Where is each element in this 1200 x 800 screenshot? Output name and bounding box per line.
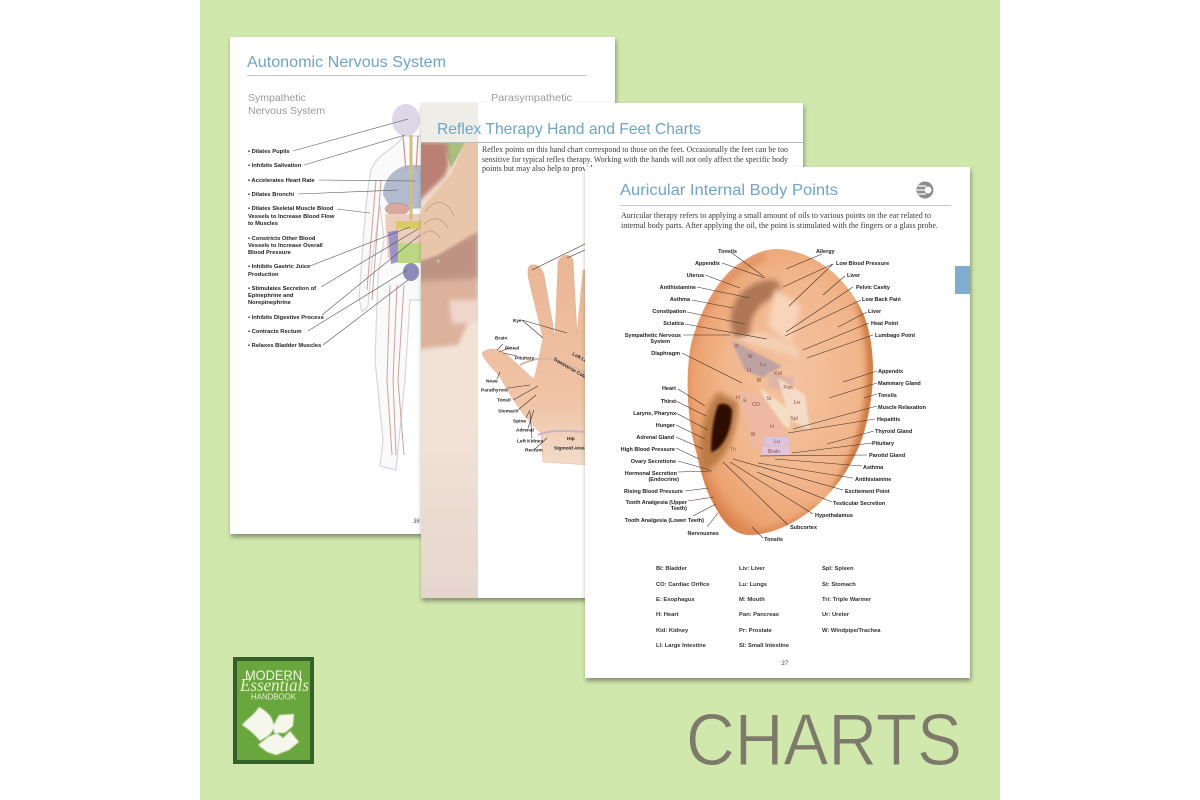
ear zone labels: W: [751, 432, 756, 438]
concha shadow: [700, 392, 738, 472]
subheading: sympathetic: Sympathetic: [248, 92, 306, 104]
ear leader lines: [676, 253, 877, 538]
sympathetic effects list: Production: [248, 272, 279, 278]
abbreviation legend: Spl: Spleen: [822, 566, 854, 572]
abbreviation legend: LI: Large Intestine: [656, 643, 707, 649]
hand illustration: [482, 255, 590, 465]
ear labels right: Appendix: [878, 369, 904, 375]
ear labels left: Tonsils: [764, 537, 783, 543]
hand labels: Hip: [567, 436, 575, 442]
title: charts: CHARTS: [686, 700, 962, 781]
logo: modern essentials handbook cover: HANDBOOK: [251, 692, 297, 702]
ear labels left: (Endocrine): [648, 477, 679, 483]
ear zone labels: P: [735, 344, 739, 350]
sympathetic effects list: • Contracts Rectum: [248, 329, 302, 335]
intro text: sensitive for typical reflex therapy. Working with the hands will not only affect the specific body: [482, 155, 789, 164]
ear labels right: Asthma: [863, 465, 884, 471]
ear labels right: Pelvic Cavity: [856, 285, 891, 291]
sympathetic effects list: Vessels to Increase Overall: [248, 243, 323, 249]
ear labels left: [621, 249, 783, 543]
side tab: [955, 266, 970, 294]
sympathetic effects list: Vessels to Increase Blood Flow: [248, 214, 335, 220]
ear labels left: Ovary Secretions: [631, 459, 676, 465]
ear labels right: Subcortex: [790, 525, 818, 531]
sympathetic effects list: • Stimulates Secretion of: [248, 286, 316, 292]
ear labels left: Appendix: [695, 261, 721, 267]
abbreviation legend: Pr: Prostate: [739, 628, 773, 634]
heading: auricular: Auricular Internal Body Points: [620, 182, 838, 199]
ear labels right: Tonsils: [878, 393, 897, 399]
ear labels right: Hypothalamus: [815, 513, 853, 519]
panel: auricular internal body points page: [585, 167, 970, 678]
ear labels left: Uterus: [687, 273, 704, 279]
ear labels left: Tonsils: [718, 249, 737, 255]
hand labels: Pituitary: [515, 356, 535, 362]
ear zone labels: St: [767, 396, 772, 402]
sympathetic effects list: • Inhibits Gastric Juice: [248, 264, 310, 270]
ear zone labels: W: [748, 354, 753, 360]
ear labels left: Asthma: [670, 297, 691, 303]
page number: 36: [413, 519, 420, 525]
ear labels left: System: [650, 339, 670, 345]
abbreviation legend: Lu: Lungs: [739, 582, 767, 588]
sympathetic effects list: • Dilates Bronchi: [248, 192, 295, 198]
ear labels right: Allergy: [816, 249, 836, 255]
sympathetic effects list: • Inhibits Salivation: [248, 163, 302, 169]
sympathetic effects list: • Dilates Pupils: [248, 149, 290, 155]
ear labels right: Mammary Gland: [878, 381, 921, 387]
upper fossa shadow: [731, 280, 780, 342]
photo strip: hand pressing: [421, 103, 478, 598]
sympathetic effects list: • Dilates Skeletal Muscle Blood: [248, 206, 333, 212]
abbreviation legend: Liv: Liver: [739, 566, 766, 572]
hand labels: Transverse Colon: [552, 357, 590, 382]
ear labels left: Tooth Analgesia (Lower Teeth): [625, 518, 704, 524]
ear labels right: Heat Point: [871, 321, 898, 327]
ear labels right: Low Blood Pressure: [836, 261, 889, 267]
panel: reflex therapy page: [412, 103, 803, 598]
abbreviation legend: Pan: Pancreas: [739, 612, 779, 618]
ear zone labels: Tri: [730, 447, 736, 453]
ear zone labels: Lu: [760, 362, 766, 368]
heading: autonomic nervous system: Autonomic Nervous System: [247, 54, 446, 71]
intro text: Reflex points on this hand chart correspond to those on the feet. Occasionally the feet can be too: [482, 145, 788, 154]
hand labels: Stomach: [498, 408, 518, 414]
abbreviation legend: Tri: Triple Warmer: [822, 597, 872, 603]
intro text: [482, 145, 789, 173]
heading: reflex therapy: Reflex Therapy Hand and Feet Charts: [437, 121, 701, 138]
abbreviation legend: E: Esophagus: [656, 597, 695, 603]
leader lines: [293, 119, 420, 345]
ear zone labels: Lu: [774, 439, 780, 445]
abbreviation legend: Ur: Ureter: [822, 612, 850, 618]
ear labels left: Adrenal Gland: [636, 435, 674, 441]
hand labels: Nose: [486, 378, 498, 384]
sympathetic effects list: • Constricts Other Blood: [248, 236, 315, 242]
hand labels: Parathyroid: [481, 388, 508, 394]
abbreviation legend: M: Mouth: [739, 597, 765, 603]
hand labels: Sigmoid Ansia: [554, 446, 587, 452]
ear labels left: High Blood Pressure: [621, 447, 675, 453]
ear zone labels: CO: [752, 402, 760, 408]
ear labels right: Testicular Secretion: [833, 501, 886, 507]
subheading: parasympathetic: Parasympathetic: [491, 92, 572, 104]
sympathetic effects list: • Relaxes Bladder Muscles: [248, 343, 321, 349]
sympathetic effects list: Blood Pressure: [248, 250, 292, 256]
sympathetic effects list: to Muscles: [248, 221, 278, 227]
abbreviation legend: CO: Cardiac Orifice: [656, 582, 710, 588]
abbreviation legend: H: Heart: [656, 612, 679, 618]
ear labels right: Pituitary: [872, 441, 895, 447]
ear labels left: Nervousnes: [688, 531, 719, 537]
ear labels right: Antihistamine: [855, 477, 891, 483]
abbreviation legend: Bl: Bladder: [656, 566, 688, 572]
ear zone labels: Pan: [783, 385, 793, 391]
ear zone labels: Kid: [774, 371, 782, 377]
ear illustration: [688, 249, 873, 535]
ear labels left: Teeth): [671, 506, 687, 512]
hand labels: Left Lu: [571, 351, 588, 364]
hand chart lines: [497, 244, 585, 449]
sympathetic effects list: [248, 149, 335, 349]
hand labels: Brain: [495, 336, 507, 342]
ear labels right: Liver: [868, 309, 882, 315]
anatomy body figure: [359, 104, 425, 470]
ear zone labels: Bl: [757, 378, 761, 384]
icon: white flowers: [242, 707, 299, 755]
intro text: Auricular therapy refers to applying a small amount of oils to various points on the ear related to: [621, 211, 931, 220]
sympathetic effects list: Epinephrine and: [248, 293, 294, 299]
ear labels right: Liver: [847, 273, 861, 279]
ear zone labels: Brain: [768, 449, 780, 455]
intro text: internal body parts. After applying the oil, the point is stimulated with the fingers or a glass probe.: [621, 221, 938, 230]
hand labels: Rectum: [525, 448, 543, 454]
ear labels left: Thirst: [661, 399, 676, 405]
ear labels left: Hunger: [656, 423, 676, 429]
green background panel: [200, 0, 1000, 800]
logo: modern essentials handbook cover: MODERN: [245, 668, 302, 683]
ear zone labels: LI: [747, 368, 751, 374]
ear labels left: Diaphragm: [651, 351, 680, 357]
ear labels right: Low Back Pain: [862, 297, 901, 303]
ear labels right: Excitement Point: [845, 489, 890, 495]
abbreviation legend: Kid: Kidney: [656, 628, 689, 634]
hand labels: [481, 318, 590, 454]
intro text: [621, 211, 938, 230]
hand labels: Spine: [513, 418, 526, 424]
ear labels right: [790, 249, 927, 531]
ear zone labels: Spl: [790, 416, 798, 422]
ear labels left: Sciatica: [663, 321, 685, 327]
logo: modern essentials handbook cover: [233, 657, 314, 764]
ear labels right: Parotid Gland: [869, 453, 905, 459]
ear zone labels: E: [743, 398, 747, 404]
sympathetic effects list: • Inhibits Digestive Process: [248, 315, 324, 321]
hand labels: Pineal: [505, 346, 519, 352]
ear labels right: Thyroid Gland: [875, 429, 912, 435]
hand labels: Eye: [513, 318, 522, 324]
intro text: points but may also help to provide: [482, 164, 597, 173]
ear labels right: Muscle Relaxation: [878, 405, 927, 411]
abbreviation legend: St: Stomach: [822, 582, 856, 588]
ear map zones: [731, 340, 782, 378]
sympathetic effects list: • Accelerates Heart Rate: [248, 178, 315, 184]
hand labels: Left Kidney: [517, 438, 543, 444]
ear labels right: Lumbago Point: [875, 333, 915, 339]
ear labels left: Larynx, Pharynx: [633, 411, 677, 417]
ear zone labels: H: [770, 424, 774, 430]
ear zone labels: [730, 344, 801, 455]
ear labels left: Constipation: [652, 309, 687, 315]
ear labels left: Tooth Analgesia (Upper: [626, 500, 688, 506]
subheading: sympathetic: Nervous System: [248, 105, 325, 117]
ear labels left: Hormonal Secretion: [625, 471, 678, 477]
ear zone labels: H: [736, 395, 740, 401]
abbreviation legend: [656, 566, 881, 649]
ear labels left: Antihistamine: [660, 285, 696, 291]
abbreviation legend: SI: Small Intestine: [739, 643, 790, 649]
abbreviation legend: W: Windpipe/Trachea: [822, 628, 881, 634]
panel: autonomic nervous system page: [230, 37, 615, 534]
icon: round emblem: [916, 182, 934, 198]
page number: 37: [781, 660, 789, 667]
ear labels left: Sympathetic Nervous: [625, 333, 681, 339]
logo: modern essentials handbook cover: Essentials: [239, 675, 309, 695]
ear labels left: Heart: [662, 386, 676, 392]
sympathetic effects list: Norepinephrine: [248, 300, 292, 306]
hand labels: Adrenal: [516, 428, 534, 434]
ear zone labels: Liv: [794, 400, 801, 406]
ear labels right: Hepatitis: [877, 417, 900, 423]
hand labels: Tonsil: [497, 398, 511, 404]
ear labels left: Rising Blood Pressure: [624, 489, 683, 495]
